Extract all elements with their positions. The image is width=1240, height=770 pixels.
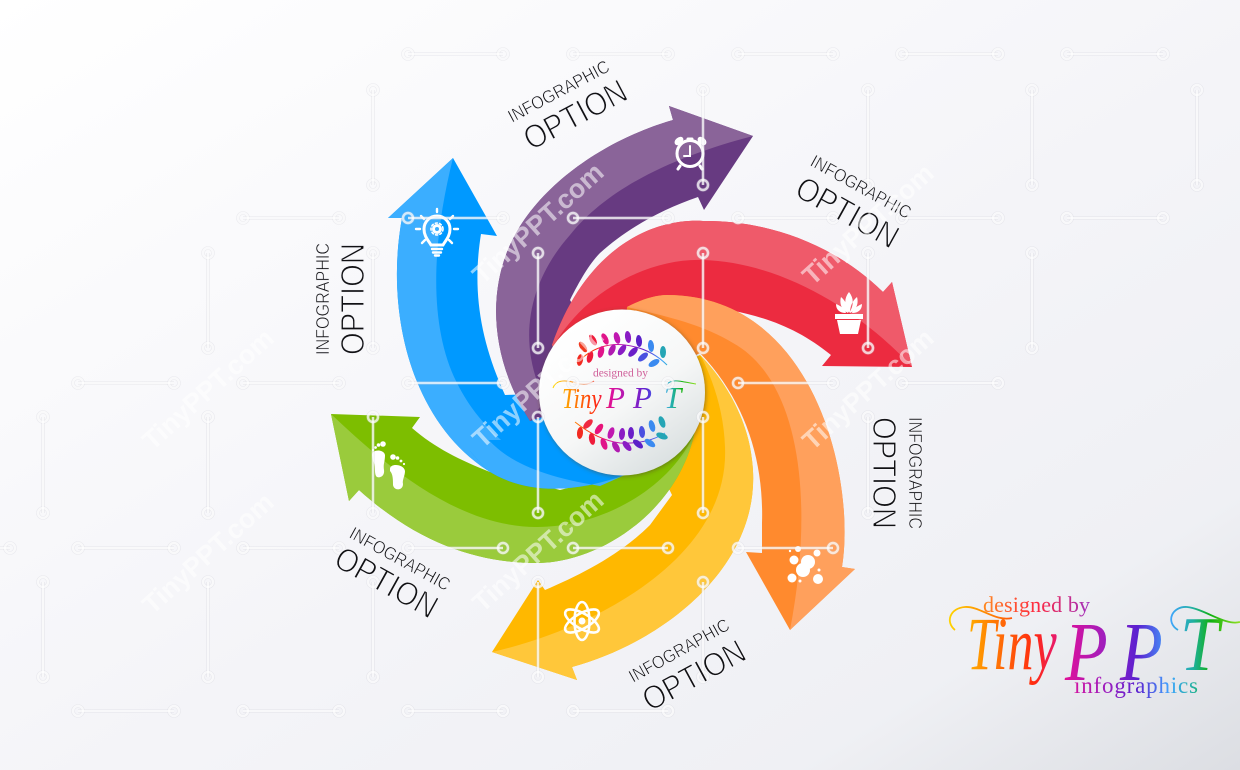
watermarks: TinyPPT.com: [466, 321, 610, 454]
arrow: blue: [388, 158, 625, 489]
watermarks: TinyPPT.com: [796, 323, 940, 456]
icon: light bulb with gear: [416, 209, 458, 256]
logo: designed by TinyPPT infographics: infographics: [1074, 673, 1198, 698]
bottom laurel: [575, 415, 669, 454]
logo: Tiny PPT: Tiny: [562, 383, 602, 415]
icon: atom: [562, 602, 602, 640]
watermarks: TinyPPT.com: [466, 157, 610, 290]
arrow: orange: [622, 295, 855, 630]
label: right option: OPTION: [866, 417, 903, 529]
label: bottom right option: OPTION: [636, 632, 752, 718]
spiral of six arrows: [331, 106, 912, 680]
label: left option: OPTION: [334, 243, 371, 355]
logo: designed by TinyPPT infographics: P: [1119, 605, 1163, 699]
label: right option: INFOGRAPHIC: [905, 417, 925, 529]
label: bottom right option: INFOGRAPHIC: [625, 615, 733, 686]
watermarks: TinyPPT.com: [796, 158, 940, 291]
icon: footprints: [372, 441, 405, 489]
label: upper right option: INFOGRAPHIC: [807, 151, 915, 223]
label: left option: INFOGRAPHIC: [313, 243, 333, 355]
arrow: yellow: [492, 355, 753, 680]
watermarks: [136, 157, 940, 620]
logo: designed by TinyPPT infographics: Tiny: [967, 603, 1057, 686]
watermarks: TinyPPT.com: [466, 485, 610, 618]
label: right option: [866, 417, 925, 529]
logo: designed by TinyPPT infographics: P: [1064, 605, 1108, 699]
label: left option: [313, 243, 371, 355]
logo: designed by TinyPPT infographics: designed by: [983, 592, 1090, 617]
label: bottom left option: OPTION: [329, 539, 445, 625]
arrow: purple: [496, 106, 753, 421]
logo: Tiny PPT: P: [605, 380, 625, 415]
label: bottom left option: INFOGRAPHIC: [346, 523, 454, 595]
logo: designed by: designed by: [593, 368, 648, 380]
top laurel: [576, 331, 667, 369]
arrow: red: [552, 221, 912, 392]
icon: potted plant: [835, 292, 863, 334]
arrow: blue tail overlapping green: [470, 440, 625, 489]
watermarks: TinyPPT.com: [136, 323, 280, 456]
watermarks: TinyPPT.com: [136, 487, 280, 620]
icon: alarm clock: [673, 135, 708, 169]
logo: designed by TinyPPT infographics: T: [1180, 601, 1224, 687]
arrow: green: [331, 414, 695, 563]
logo: Tiny PPT: [553, 380, 696, 415]
logo: Tiny PPT: T: [664, 380, 684, 415]
icon: bubbles: [788, 546, 823, 584]
logo: Tiny PPT: P: [632, 380, 652, 415]
label: top option: INFOGRAPHIC: [504, 56, 613, 127]
label: top option: OPTION: [517, 72, 633, 157]
center disc with logo: [539, 310, 705, 476]
label: upper right option: OPTION: [790, 169, 906, 255]
logo: designed by TinyPPT infographics: [950, 592, 1240, 699]
